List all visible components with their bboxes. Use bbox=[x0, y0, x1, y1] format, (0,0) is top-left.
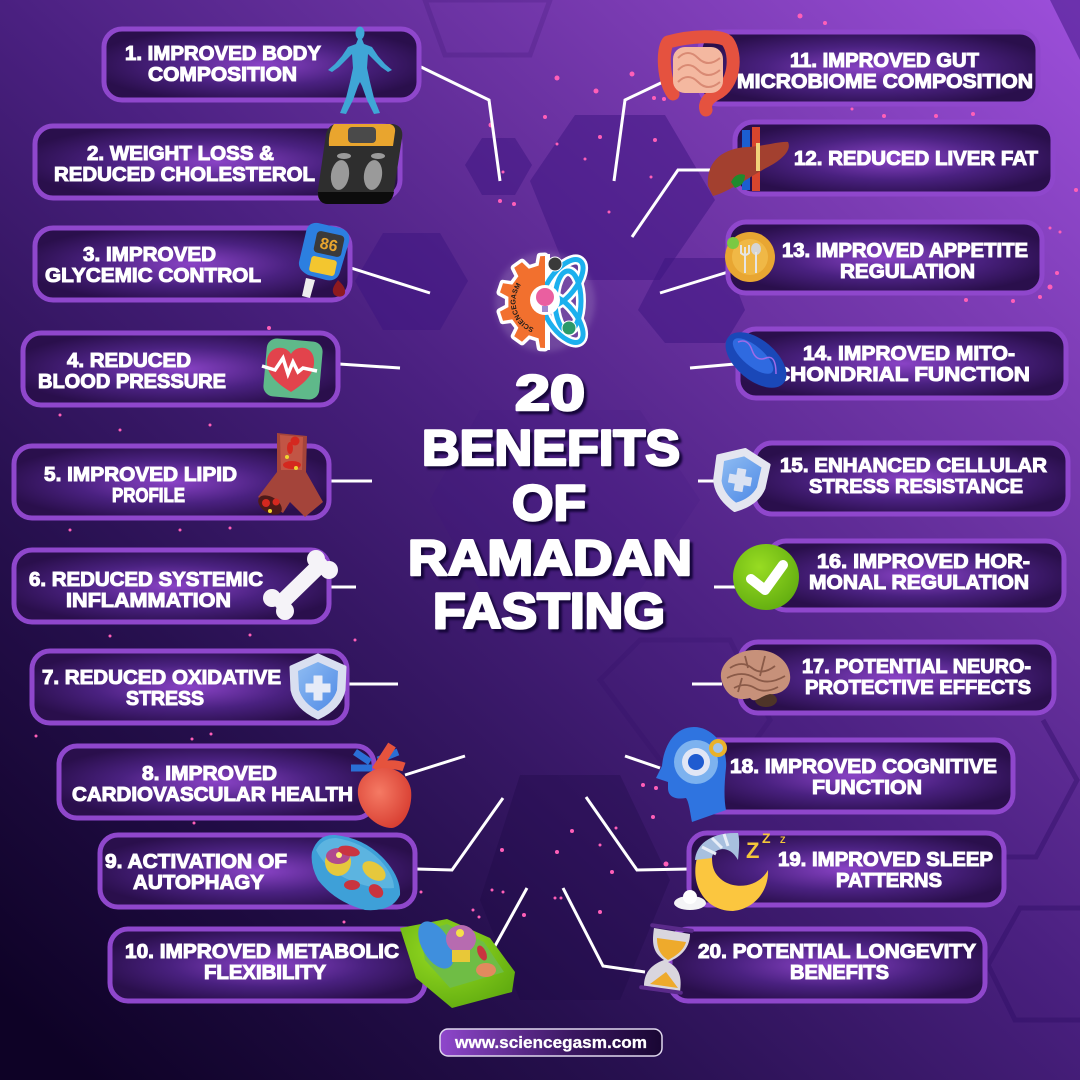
text 16 bbox=[809, 551, 1030, 594]
text 7: STRESS bbox=[126, 688, 204, 710]
text 14: CHONDRIAL FUNCTION bbox=[774, 364, 1030, 386]
icon: crescent moon with nightcap: Z bbox=[746, 838, 759, 863]
text 20: BENEFITS bbox=[790, 962, 889, 984]
website pill bbox=[440, 1029, 662, 1056]
text 9 bbox=[105, 851, 287, 894]
icon: heart with ECG card bbox=[262, 338, 323, 400]
text 1: 1. IMPROVED BODY bbox=[125, 43, 322, 65]
connector lines bbox=[330, 67, 752, 972]
text 19: 19. IMPROVED SLEEP bbox=[778, 849, 993, 871]
logo: sciencegasm gear and atom: SCIENCEGASM bbox=[510, 282, 534, 332]
panel 5: improved lipid profile bbox=[14, 433, 329, 519]
text 2 bbox=[54, 143, 315, 186]
panel 14: improved mitochondrial function bbox=[716, 322, 1066, 398]
text 18: FUNCTION bbox=[812, 777, 922, 799]
panel 20: potential longevity benefits bbox=[639, 923, 985, 1001]
connector 20 bbox=[563, 888, 645, 972]
text 17: 17. POTENTIAL NEURO- bbox=[802, 656, 1031, 678]
panel 8: improved cardiovascular health bbox=[59, 745, 411, 828]
text 15 bbox=[780, 455, 1048, 498]
icon: shield bbox=[709, 445, 771, 515]
connector 8 bbox=[405, 756, 465, 775]
text 14: 14. IMPROVED MITO- bbox=[803, 343, 1015, 365]
text 8 bbox=[72, 763, 353, 806]
text 3: GLYCEMIC CONTROL bbox=[45, 265, 261, 287]
panel 3: improved glycemic control bbox=[35, 223, 350, 300]
panel 6: reduced systemic inflammation bbox=[14, 550, 338, 622]
text 10: 10. IMPROVED METABOLIC bbox=[125, 941, 399, 963]
icon: crescent moon with nightcap bbox=[674, 830, 786, 911]
text 11: MICROBIOME COMPOSITION bbox=[737, 71, 1033, 93]
icon: hourglass bbox=[639, 923, 694, 995]
panel 16: improved hormonal regulation bbox=[733, 541, 1064, 610]
text 7 bbox=[42, 667, 281, 710]
icon: intestines bbox=[664, 37, 733, 110]
text 3 bbox=[45, 244, 261, 287]
text 16: MONAL REGULATION bbox=[809, 572, 1029, 594]
icon: anatomical heart bbox=[351, 745, 411, 828]
website pill: www.sciencegasm.com bbox=[454, 1033, 647, 1052]
connector 17 bbox=[692, 682, 722, 686]
panel 15: enhanced cellular stress resistance bbox=[709, 443, 1068, 515]
text 13: REGULATION bbox=[840, 261, 975, 283]
connector 3 bbox=[351, 268, 430, 293]
text 20: 20. POTENTIAL LONGEVITY bbox=[698, 941, 977, 963]
text 9: 9. ACTIVATION OF bbox=[105, 851, 287, 873]
panel 17: potential neuroprotective effects bbox=[721, 642, 1054, 713]
text 5 bbox=[44, 464, 237, 507]
title bbox=[408, 365, 692, 639]
text 13 bbox=[782, 240, 1028, 283]
text 9: AUTOPHAGY bbox=[133, 872, 265, 894]
icon: crescent moon with nightcap: Z bbox=[780, 835, 786, 845]
icon: brain bbox=[721, 650, 790, 707]
text 8: 8. IMPROVED bbox=[142, 763, 277, 785]
text 5: PROFILE bbox=[112, 485, 185, 507]
background hexagon pattern bbox=[355, 0, 1080, 1020]
title: RAMADAN bbox=[408, 530, 692, 586]
text 7: 7. REDUCED OXIDATIVE bbox=[42, 667, 281, 689]
panel 7: reduced oxidative stress bbox=[32, 651, 347, 723]
text 12: 12. REDUCED LIVER FAT bbox=[794, 148, 1038, 170]
text 8: CARDIOVASCULAR HEALTH bbox=[72, 784, 353, 806]
text 4 bbox=[38, 350, 226, 393]
connector 11 bbox=[614, 81, 665, 181]
text 13: 13. IMPROVED APPETITE bbox=[782, 240, 1028, 262]
icon: head with gear bbox=[656, 727, 726, 822]
connector 1 bbox=[421, 67, 500, 181]
text 17: PROTECTIVE EFFECTS bbox=[805, 677, 1031, 699]
panel 12: reduced liver fat bbox=[708, 122, 1053, 196]
icon: shield bbox=[291, 655, 345, 718]
text 16: 16. IMPROVED HOR- bbox=[817, 551, 1030, 573]
text 19 bbox=[778, 849, 993, 892]
text 10: FLEXIBILITY bbox=[204, 962, 327, 984]
text 6: 6. REDUCED SYSTEMIC bbox=[29, 569, 263, 591]
text 4: 4. REDUCED bbox=[67, 350, 191, 372]
text 6 bbox=[29, 569, 263, 612]
panel 11: improved gut microbiome composition bbox=[664, 32, 1038, 110]
connector 6 bbox=[330, 586, 356, 588]
panel 9: activation of autophagy bbox=[100, 835, 415, 910]
icon: glucose meter: 86 bbox=[318, 235, 339, 256]
connector 10 bbox=[490, 888, 527, 955]
panel 4: reduced blood pressure bbox=[23, 333, 338, 405]
connector 7 bbox=[348, 682, 398, 686]
panel 2: weight loss and reduced cholesterol bbox=[35, 124, 402, 204]
text 11: 11. IMPROVED GUT bbox=[790, 50, 979, 72]
connector 18 bbox=[625, 756, 660, 768]
icon: mitochondrion bbox=[716, 322, 796, 398]
panel 10: improved metabolic flexibility bbox=[110, 915, 515, 1008]
connector 13 bbox=[660, 272, 728, 293]
text 1 bbox=[125, 43, 322, 86]
connector 16 bbox=[714, 586, 735, 588]
connector 19 bbox=[586, 797, 690, 870]
title: FASTING bbox=[433, 583, 665, 639]
text 18: 18. IMPROVED COGNITIVE bbox=[730, 756, 997, 778]
text 18 bbox=[730, 756, 997, 799]
text 15: STRESS RESISTANCE bbox=[809, 476, 1023, 498]
connector 4 bbox=[339, 364, 400, 368]
icon: liver bbox=[708, 127, 789, 196]
icon: crescent moon with nightcap: Z bbox=[762, 830, 771, 846]
logo: sciencegasm gear and atom bbox=[494, 250, 596, 354]
title: OF bbox=[512, 475, 586, 531]
connector 9 bbox=[416, 798, 503, 870]
text 2: 2. WEIGHT LOSS & bbox=[87, 143, 274, 165]
text 14 bbox=[774, 343, 1030, 386]
icon: blocked artery bbox=[255, 433, 323, 519]
panel 19: improved sleep patterns bbox=[674, 830, 1004, 911]
icon: bone bbox=[263, 550, 338, 620]
connector 14 bbox=[690, 364, 735, 368]
text 4: BLOOD PRESSURE bbox=[38, 371, 226, 393]
icon: plant cell bbox=[400, 915, 515, 1008]
panel 1: improved body composition bbox=[104, 26, 419, 114]
icon: bathroom scale bbox=[318, 124, 402, 204]
text 17 bbox=[802, 656, 1031, 699]
title: BENEFITS bbox=[422, 420, 680, 476]
text 15: 15. ENHANCED CELLULAR bbox=[780, 455, 1048, 477]
text 5: 5. IMPROVED LIPID bbox=[44, 464, 237, 486]
connector 5 bbox=[330, 480, 372, 482]
panel 13: improved appetite regulation bbox=[725, 222, 1042, 293]
icon: human body bbox=[328, 26, 392, 114]
icon: glucose meter bbox=[299, 223, 349, 298]
text 11 bbox=[737, 50, 1033, 93]
panel 18: improved cognitive function bbox=[656, 727, 1013, 822]
icon: green check mark bbox=[733, 544, 799, 610]
text 1: COMPOSITION bbox=[148, 64, 297, 86]
text 6: INFLAMMATION bbox=[66, 590, 231, 612]
text 3: 3. IMPROVED bbox=[83, 244, 216, 266]
text 10 bbox=[125, 941, 399, 984]
title: 20 bbox=[515, 365, 585, 421]
text 2: REDUCED CHOLESTEROL bbox=[54, 164, 315, 186]
icon: plate with fork and spoon bbox=[725, 232, 775, 282]
text 20 bbox=[698, 941, 977, 984]
icon: animal cell bbox=[312, 835, 400, 910]
text 19: PATTERNS bbox=[836, 870, 942, 892]
connector 15 bbox=[698, 480, 752, 482]
connector 12 bbox=[632, 170, 710, 237]
